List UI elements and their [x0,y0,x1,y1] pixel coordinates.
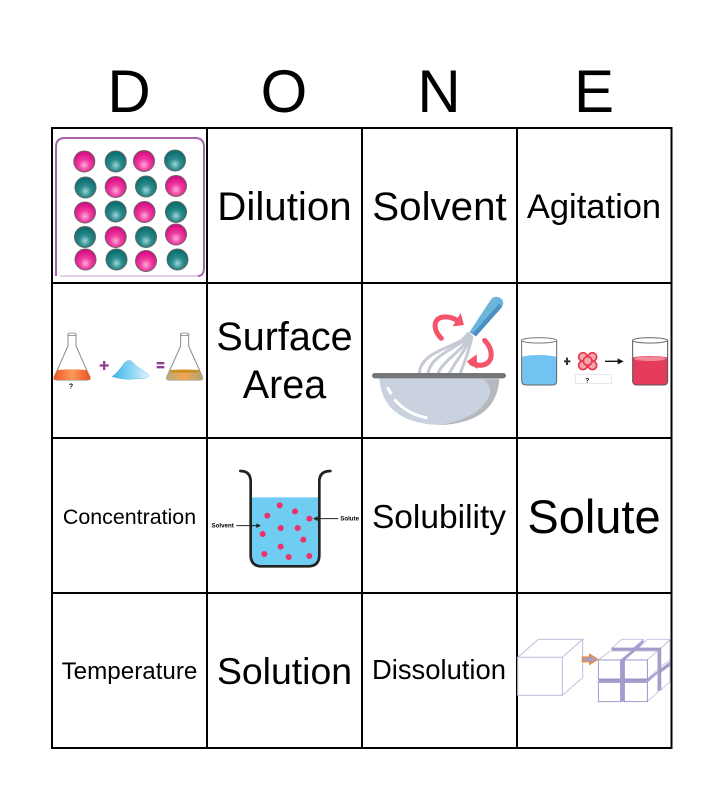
word: Dissolution: Dissolution [372,654,506,685]
word: Solute: Solute [527,490,661,543]
grid [52,128,672,748]
icon: beaker with solvent and solute: Solvent [212,523,234,530]
title letters: N [417,58,461,125]
icon: beaker with solvent and solute [212,471,360,566]
word: Solution: Solution [217,650,352,692]
word: Surface Area: Surface [216,315,353,359]
icon: beaker reaction: ? [585,377,589,384]
icon: cube divided into smaller cubes [518,639,670,702]
word: Dilution: Dilution [217,184,352,229]
icon: whisk in bowl [372,297,506,425]
icon: beaker with solvent and solute: Solute [340,515,360,522]
title letters: D [107,58,151,125]
word: Surface Area: Area [243,363,326,407]
title letters: E [574,58,614,125]
word: Concentration: Concentration [63,505,196,529]
word: Agitation: Agitation [527,188,661,226]
word: Solvent: Solvent [372,184,507,229]
title letters: O [261,58,307,125]
word: Temperature: Temperature [62,658,197,685]
icon: flask plus powder [54,333,203,391]
icon: particle grid [56,138,204,276]
icon: flask plus powder: ? [69,384,73,391]
title letters [107,58,614,125]
icon: beaker reaction [521,338,668,385]
word: Solubility: Solubility [372,499,506,536]
